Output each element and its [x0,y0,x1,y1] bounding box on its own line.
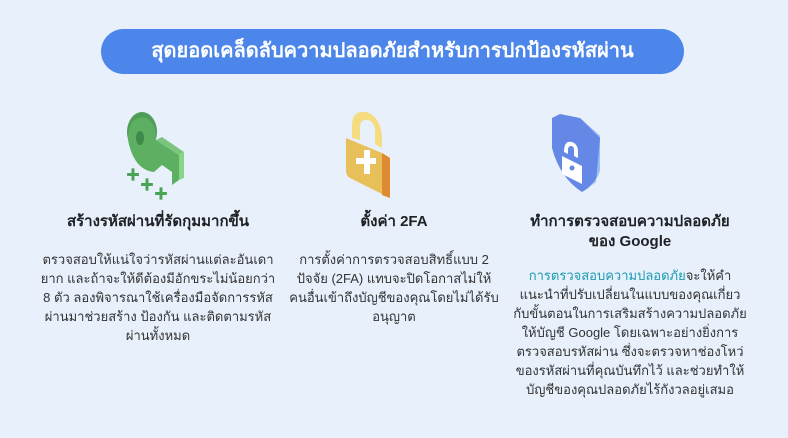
column: strong passwords: ผ่านมาช่วยสร้าง ป้องกัน และติดตามรหัส [45,309,271,324]
icon: green key: ✚ [126,167,140,183]
title [101,29,684,74]
column: strong passwords: 8 ตัว ลองพิจารณาใช้เครื่องมือจัดการรหัส [43,290,273,305]
column: strong passwords: ผ่านทั้งหมด [126,328,190,343]
column: Google security checkup: ของ Google [589,233,671,250]
column: Google security checkup: กับขั้นตอนในการเสริมสร้างความปลอดภัย [513,306,747,321]
icon: blue shield with lock [552,114,600,192]
icon: green key [126,112,184,202]
column: 2FA: ตั้งค่า 2FA [360,213,428,230]
icon: yellow padlock with plus [346,112,390,198]
column: strong passwords: สร้างรหัสผ่านที่รัดกุมมากขึ้น [67,213,249,230]
column: Google security checkup: ของรหัสผ่านที่คุณบันทึกไว้ และช่วยทำให้ [516,363,744,378]
column: 2FA: คนอื่นเข้าถึงบัญชีของคุณโดยไม่ได้รับ [289,290,499,305]
column: Google security checkup: บัญชีของคุณปลอดภัยไร้กังวลอยู่เสมอ [526,382,734,397]
column: 2FA: การตั้งค่าการตรวจสอบสิทธิ์แบบ 2 [299,252,489,267]
column: Google security checkup: ตรวจสอบรหัสผ่าน ซึ่งจะตรวจหาช่องโหว่ [516,344,744,359]
column: 2FA: อนุญาต [372,309,416,324]
column: Google security checkup: ให้บัญชี Google โดยเฉพาะอย่างยิ่งการ [522,325,738,340]
column: strong passwords: ตรวจสอบให้แน่ใจว่ารหัสผ่านแต่ละอันเดา [42,252,274,267]
column: strong passwords: ยาก และถ้าจะให้ดีต้องมีอักขระไม่น้อยกว่า [41,271,275,286]
column: Google security checkup: การตรวจสอบความปลอดภัยจะให้คำ [529,268,731,283]
column: 2FA [289,210,499,324]
column: Google security checkup: แนะนำที่ปรับเปลี่ยนในแบบของคุณเกี่ยว [520,287,740,302]
icon: green key: ✚ [154,186,168,202]
column: strong passwords [41,210,275,343]
column: Google security checkup: ทำการตรวจสอบความปลอดภัย [530,213,730,230]
icon: green key: ✚ [140,177,154,193]
column: 2FA: ปัจจัย (2FA) แทบจะปิดโอกาสไม่ให้ [297,271,491,286]
column: Google security checkup [513,213,747,398]
title: สุดยอดเคล็ดลับความปลอดภัยสำหรับการปกป้องรหัสผ่าน [151,40,634,62]
